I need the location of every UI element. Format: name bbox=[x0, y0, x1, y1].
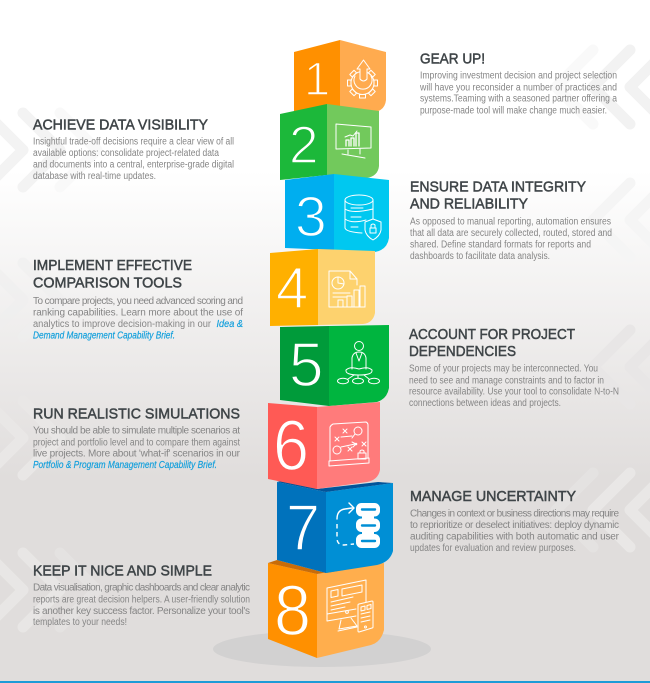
block: run realistic simulations bbox=[33, 406, 241, 471]
body text: Portfolio & Program Management Capability Brief. bbox=[33, 460, 217, 471]
block: manage uncertainty bbox=[410, 488, 620, 554]
body text: Demand Management Capability Brief. bbox=[33, 330, 175, 342]
cube 6 bbox=[268, 402, 380, 489]
body text: resource availability. Use your tool to consolidate N-to-N bbox=[409, 386, 619, 398]
body text: connections between ideas and projects. bbox=[409, 398, 561, 409]
block: implement comparison tools bbox=[33, 257, 243, 342]
number 7: 7 bbox=[286, 491, 320, 564]
body text: purpose-made tool will make change much easier. bbox=[420, 106, 607, 116]
number 3: 3 bbox=[295, 185, 327, 249]
body text: Changes in context or business directions may require bbox=[410, 508, 619, 520]
body text: to reprioritize or deselect initiatives: deploy dynamic bbox=[410, 520, 619, 531]
body text bbox=[409, 364, 619, 409]
body text bbox=[33, 426, 241, 471]
icon: meditating person with nodes bbox=[338, 342, 380, 384]
number 6: 6 bbox=[273, 407, 309, 486]
body text: database with real-time updates. bbox=[33, 171, 156, 182]
heading: KEEP IT NICE AND SIMPLE bbox=[33, 562, 212, 579]
body text: As opposed to manual reporting, automation ensures bbox=[410, 216, 611, 228]
cube 8 bbox=[268, 560, 384, 658]
heading: ENSURE DATA INTEGRITY bbox=[410, 178, 586, 195]
icon: monitor with chart bbox=[336, 124, 371, 158]
background chevrons right bbox=[556, 50, 650, 547]
body text: is another key success factor. Personalize your tool's bbox=[33, 606, 250, 617]
block: gear up bbox=[419, 50, 617, 116]
body text: updates for evaluation and review purposes. bbox=[410, 543, 576, 554]
body text: will have you reconsider a number of practices and bbox=[419, 82, 617, 94]
body text: auditing capabilities with both automatic and user bbox=[410, 532, 620, 542]
block: ensure data integrity bbox=[410, 178, 612, 262]
body text: and documents into a central, enterprise-grade digital bbox=[33, 160, 234, 170]
body text: To compare projects, you need advanced scoring and bbox=[33, 296, 243, 307]
body text bbox=[410, 216, 612, 262]
number 8: 8 bbox=[274, 572, 311, 651]
heading: COMPARISON TOOLS bbox=[33, 274, 182, 291]
body text: reports are great decision helpers. A user-friendly solution bbox=[33, 594, 250, 606]
heading bbox=[33, 257, 192, 291]
body text bbox=[33, 136, 234, 182]
body text bbox=[410, 508, 620, 554]
cube 2 bbox=[280, 104, 379, 180]
ground shadow bbox=[213, 631, 431, 667]
icon: report document bbox=[329, 271, 365, 307]
number 1: 1 bbox=[304, 52, 330, 105]
body text: live projects. More about 'what-if' scenarios in our bbox=[33, 448, 241, 460]
block: achieve data visibility bbox=[33, 116, 234, 182]
bottom rule bbox=[0, 681, 650, 683]
cube 7 bbox=[277, 480, 393, 573]
cube 3 bbox=[285, 174, 389, 252]
body text: need to see and manage constraints and to factor in bbox=[409, 376, 604, 386]
cube 1 bbox=[294, 40, 386, 112]
body text: available options: consolidate project-related data bbox=[33, 148, 219, 159]
body text: analytics to improve decision-making in our bbox=[33, 319, 212, 330]
heading: AND RELIABILITY bbox=[410, 195, 528, 212]
body text: Some of your projects may be interconnected. You bbox=[409, 364, 598, 374]
body text: Improving investment decision and project selection bbox=[420, 70, 617, 82]
number 4: 4 bbox=[276, 256, 308, 321]
cube 8 top shadow bbox=[268, 560, 384, 574]
heading: DEPENDENCIES bbox=[409, 343, 516, 360]
heading: ACHIEVE DATA VISIBILITY bbox=[33, 116, 208, 133]
body text: You should be able to simulate multiple scenarios at bbox=[33, 426, 240, 436]
block: account for dependencies bbox=[409, 326, 619, 409]
body text bbox=[419, 70, 617, 116]
body text: templates to your needs! bbox=[33, 617, 127, 628]
heading: RUN REALISTIC SIMULATIONS bbox=[33, 406, 240, 423]
body text: Data visualisation, graphic dashboards and clear analytic bbox=[33, 582, 250, 594]
body text bbox=[33, 582, 250, 628]
heading bbox=[409, 326, 575, 360]
number 5: 5 bbox=[289, 331, 323, 400]
number 2: 2 bbox=[289, 116, 318, 175]
icon: strategy board bbox=[329, 422, 369, 466]
body text: systems.Teaming with a seasoned partner offering a bbox=[420, 94, 617, 104]
icon: gear with up arrow bbox=[348, 60, 378, 98]
body text bbox=[33, 296, 243, 342]
body text: dashboards to facilitate data analysis. bbox=[410, 251, 550, 262]
block: keep it nice and simple bbox=[33, 562, 250, 628]
heading: MANAGE UNCERTAINTY bbox=[410, 488, 576, 505]
body text: ranking capabilities. Learn more about the use of bbox=[33, 308, 243, 318]
heading: IMPLEMENT EFFECTIVE bbox=[33, 257, 192, 274]
cube 7 top shadow bbox=[277, 480, 393, 492]
heading: GEAR UP! bbox=[420, 50, 485, 67]
cube 4 bbox=[270, 249, 375, 326]
heading bbox=[410, 178, 586, 212]
icon: process chain with dashed arrow bbox=[337, 503, 380, 548]
body text: shared. Define standard formats for reports and bbox=[410, 240, 591, 250]
icon: database with shield bbox=[345, 195, 381, 240]
cube 5 bbox=[280, 325, 389, 406]
body text: project and portfolio level and to compare them against bbox=[33, 438, 240, 448]
heading: ACCOUNT FOR PROJECT bbox=[409, 326, 575, 343]
body text: Insightful trade-off decisions require a clear view of all bbox=[33, 136, 234, 148]
body text: Idea & bbox=[216, 319, 243, 330]
background chevrons left bbox=[0, 113, 97, 627]
icon: desktop and phone bbox=[327, 580, 373, 632]
body text: that all data are securely collected, routed, stored and bbox=[410, 228, 612, 239]
